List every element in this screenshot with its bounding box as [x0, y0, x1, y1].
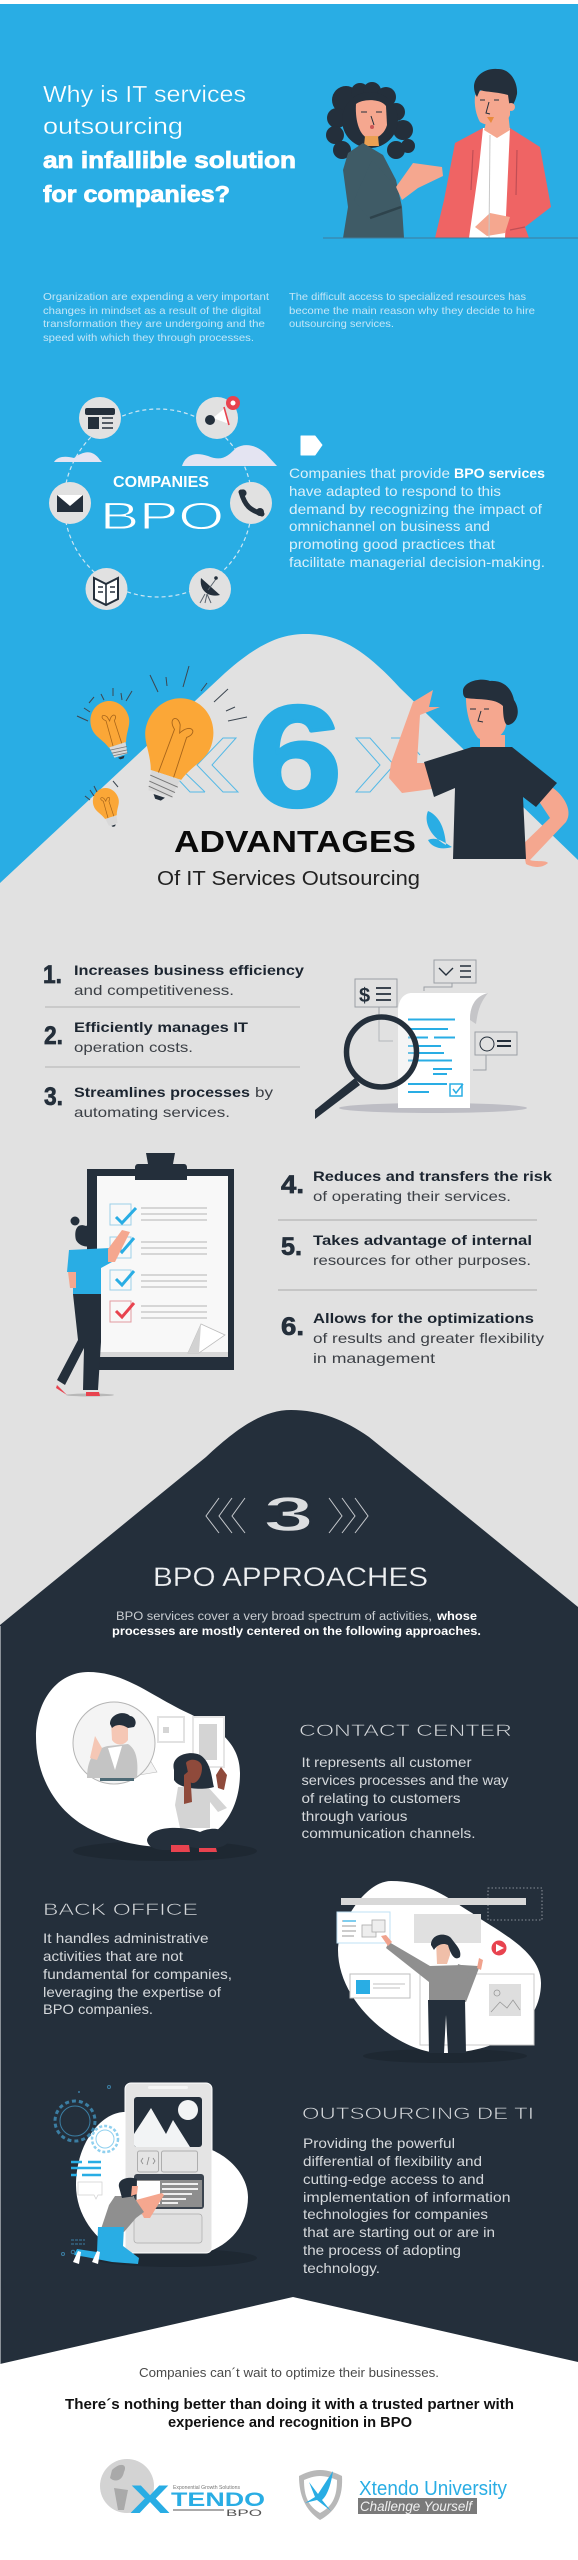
page curl	[188, 1324, 225, 1353]
illustration: two colleagues talking	[323, 69, 578, 238]
text: back office: BPO companies.	[43, 2001, 153, 2017]
text block: BPO services: demand by recognizing the impact of	[289, 501, 542, 517]
advantage 6: in management	[313, 1350, 435, 1366]
presenter	[381, 1935, 483, 2053]
icon: satellite dish	[189, 568, 231, 610]
text block: BPO services: Companies that provide	[289, 465, 450, 481]
text: outsourcing de TI: technologies for companies	[303, 2206, 488, 2222]
background: dark mountain section	[0, 1410, 578, 2380]
title: outsourcing	[43, 113, 183, 139]
text: back office: fundamental for companies,	[43, 1966, 232, 1982]
advantage 1: 1.	[43, 961, 62, 989]
medium bulb	[85, 696, 140, 765]
text: contact center: through various	[302, 1808, 408, 1824]
left arm raised	[389, 690, 440, 793]
shirt	[424, 747, 557, 859]
advantage 5: resources for other purposes.	[313, 1252, 531, 1268]
text: back office: It handles administrative	[43, 1930, 209, 1946]
advantage 1	[43, 961, 304, 998]
advantage 3	[44, 1083, 273, 1120]
neck and face	[480, 735, 505, 752]
advantage 2	[44, 1019, 249, 1055]
text: outsourcing de TI: the process of adopting	[303, 2242, 461, 2258]
logo: Xtendo University	[299, 2470, 507, 2520]
intro text: right column: outsourcing services.	[289, 318, 394, 330]
logo: Xtendo BPO: Exponential Growth Solutions	[173, 2485, 241, 2491]
text: contact center	[302, 1754, 508, 1841]
intro text: right column	[289, 291, 535, 330]
large bulb	[126, 689, 223, 810]
advantage 5	[281, 1232, 532, 1268]
woman on phone	[147, 1753, 230, 1852]
logo: Xtendo University: Challenge Yourself	[360, 2498, 474, 2514]
background: grey mountain section	[0, 634, 578, 1660]
icon: chevrons left of 3	[206, 1498, 245, 1533]
logo: Xtendo BPO: TENDO	[171, 2490, 265, 2511]
illustration: document under magnifier	[315, 960, 527, 1119]
heading: back office: BACK OFFICE	[43, 1900, 198, 1919]
intro text: right column: become the main reason why they decide to hire	[289, 305, 535, 317]
icon: light bulbs	[77, 666, 247, 831]
text: back office: leveraging the expertise of	[43, 1984, 221, 2000]
text: outsourcing de TI: implementation of information	[303, 2189, 510, 2205]
text: contact center: services processes and the way	[302, 1772, 508, 1788]
title: for companies?	[43, 181, 230, 207]
advantage 4: Reduces and transfers the risk	[313, 1168, 552, 1184]
advantage 4	[281, 1168, 552, 1204]
icon: open book	[86, 568, 128, 610]
icon: envelope	[49, 482, 91, 524]
text: outsourcing de TI: cutting-edge access to and	[303, 2171, 484, 2187]
diagram: BPO omnichannel ring	[49, 396, 277, 610]
advantage 3: Streamlines processes	[74, 1084, 250, 1100]
advantage 2: operation costs.	[74, 1039, 193, 1055]
bulb rays	[77, 666, 247, 800]
leaf	[427, 811, 452, 848]
advantage 5: Takes advantage of internal	[313, 1232, 532, 1248]
advantage 4: of operating their services.	[313, 1188, 511, 1204]
logo: Xtendo University: Xtendo University	[359, 2478, 507, 2500]
label: companies: COMPANIES	[113, 474, 209, 491]
kneeling person	[73, 2178, 164, 2264]
advantage 6: Allows for the optimizations	[313, 1310, 534, 1326]
ground line	[323, 237, 578, 239]
right arm	[522, 785, 569, 867]
label: BPO: BPO	[100, 496, 224, 538]
text: contact center: communication channels.	[302, 1825, 476, 1841]
background: white footer chevron	[0, 2297, 578, 2560]
heading: outsourcing de TI: OUTSOURCING DE TI	[302, 2104, 534, 2123]
woman	[326, 82, 443, 238]
text block: BPO services: facilitate managerial decision-making.	[289, 554, 545, 570]
advantage 5: 5.	[281, 1233, 302, 1261]
intro text: left column: speed with which they through processes.	[43, 332, 254, 344]
icon: telephone	[230, 482, 272, 524]
gears	[55, 2101, 95, 2141]
illustration: person ticking a clipboard	[56, 1153, 234, 1396]
text block: BPO services	[289, 465, 545, 570]
text: contact center: of relating to customers	[302, 1790, 460, 1806]
intro text: approaches: whose	[436, 1611, 477, 1623]
logo: Xtendo BPO: X	[130, 2478, 170, 2522]
cloud left	[54, 452, 102, 462]
heading: BPO approaches: BPO APPROACHES	[153, 1562, 428, 1592]
small bulb	[89, 785, 126, 831]
intro text: approaches: processes are mostly centered on the following approaches.	[112, 1626, 481, 1638]
illustration: IT outsourcing	[55, 2083, 257, 2267]
heading: advantages: ADVANTAGES	[174, 824, 416, 859]
hair	[463, 680, 518, 725]
text: back office: activities that are not	[43, 1948, 183, 1964]
title: an infallible solution	[43, 147, 296, 173]
checklist rows	[110, 1204, 131, 1322]
text: back office	[43, 1930, 232, 2017]
logo: Xtendo BPO	[100, 2459, 265, 2522]
subheading: Of IT Services Outsourcing	[157, 868, 420, 890]
text block: BPO services: omnichannel on business and	[289, 518, 490, 534]
illustration: document under magnifier: $	[359, 985, 370, 1007]
advantage 2: Efficiently manages IT	[74, 1019, 249, 1035]
logo: Xtendo BPO: BPO	[226, 2508, 262, 2519]
intro text: left column: transformation they are undergoing and the	[43, 318, 265, 330]
big number 6: 6	[249, 676, 342, 837]
icon: web page	[79, 397, 121, 439]
advantage 2: 2.	[44, 1022, 63, 1050]
speech bubble agent	[73, 1702, 157, 1784]
closing statement	[65, 2397, 514, 2431]
person	[56, 1216, 130, 1396]
icon: outline chevrons right	[356, 738, 420, 792]
advantage 1: Increases business efficiency	[74, 962, 304, 978]
text: outsourcing de TI: Providing the powerful	[303, 2135, 455, 2151]
advantage 6: of results and greater flexibility	[313, 1330, 544, 1346]
advantage 3: by	[255, 1084, 273, 1100]
text: outsourcing de TI: technology.	[303, 2260, 380, 2276]
intro text: approaches: BPO services cover a very broad spectrum of activities,	[116, 1611, 432, 1623]
closing statement: experience and recognition in BPO	[168, 2415, 412, 2431]
icon: white tag marker	[301, 436, 322, 455]
cloud right	[182, 445, 277, 466]
intro text: right column: The difficult access to specialized resources has	[289, 291, 526, 303]
icon: outline chevrons left	[177, 738, 238, 792]
illustration: contact center	[36, 1672, 257, 1861]
number 3: 3	[263, 1488, 314, 1542]
text: contact center: It represents all customer	[302, 1754, 472, 1770]
advantage 3: 3.	[44, 1083, 63, 1111]
text block: BPO services: promoting good practices that	[289, 536, 495, 552]
text block: BPO services: BPO services	[454, 465, 545, 481]
heading: contact center: CONTACT CENTER	[299, 1721, 512, 1740]
icon: chevrons right of 3	[329, 1498, 368, 1533]
title	[43, 81, 296, 207]
text: outsourcing de TI: that are starting out or are in	[303, 2224, 495, 2240]
text: outsourcing de TI	[303, 2135, 510, 2276]
advantage 4: 4.	[281, 1171, 304, 1199]
closing line: Companies can´t wait to optimize their businesses.	[139, 2366, 439, 2380]
intro text: left column: changes in mindset as a result of the digital	[43, 305, 261, 317]
advantage 6	[281, 1310, 544, 1366]
code lines	[71, 2162, 101, 2175]
shield	[299, 2470, 342, 2520]
illustration: man pointing	[389, 680, 569, 867]
chat bubble	[78, 2182, 102, 2199]
closing statement: There´s nothing better than doing it with a trusted partner with	[65, 2397, 514, 2413]
intro text: left column	[43, 291, 269, 344]
clipboard clip	[135, 1153, 187, 1180]
icon: megaphone with heart	[196, 396, 240, 439]
text block: BPO services: have adapted to respond to this	[289, 483, 501, 499]
intro text: approaches	[112, 1611, 481, 1638]
advantage 3: automating services.	[74, 1104, 230, 1120]
man	[435, 69, 551, 238]
text: outsourcing de TI: differential of flexibility and	[303, 2153, 482, 2169]
title: Why is IT services	[43, 81, 246, 107]
advantage 1: and competitiveness.	[74, 982, 234, 998]
phone	[125, 2083, 212, 2253]
illustration: back office	[337, 1881, 542, 2063]
advantage 6: 6.	[281, 1313, 304, 1341]
intro text: left column: Organization are expending a very important	[43, 291, 269, 303]
